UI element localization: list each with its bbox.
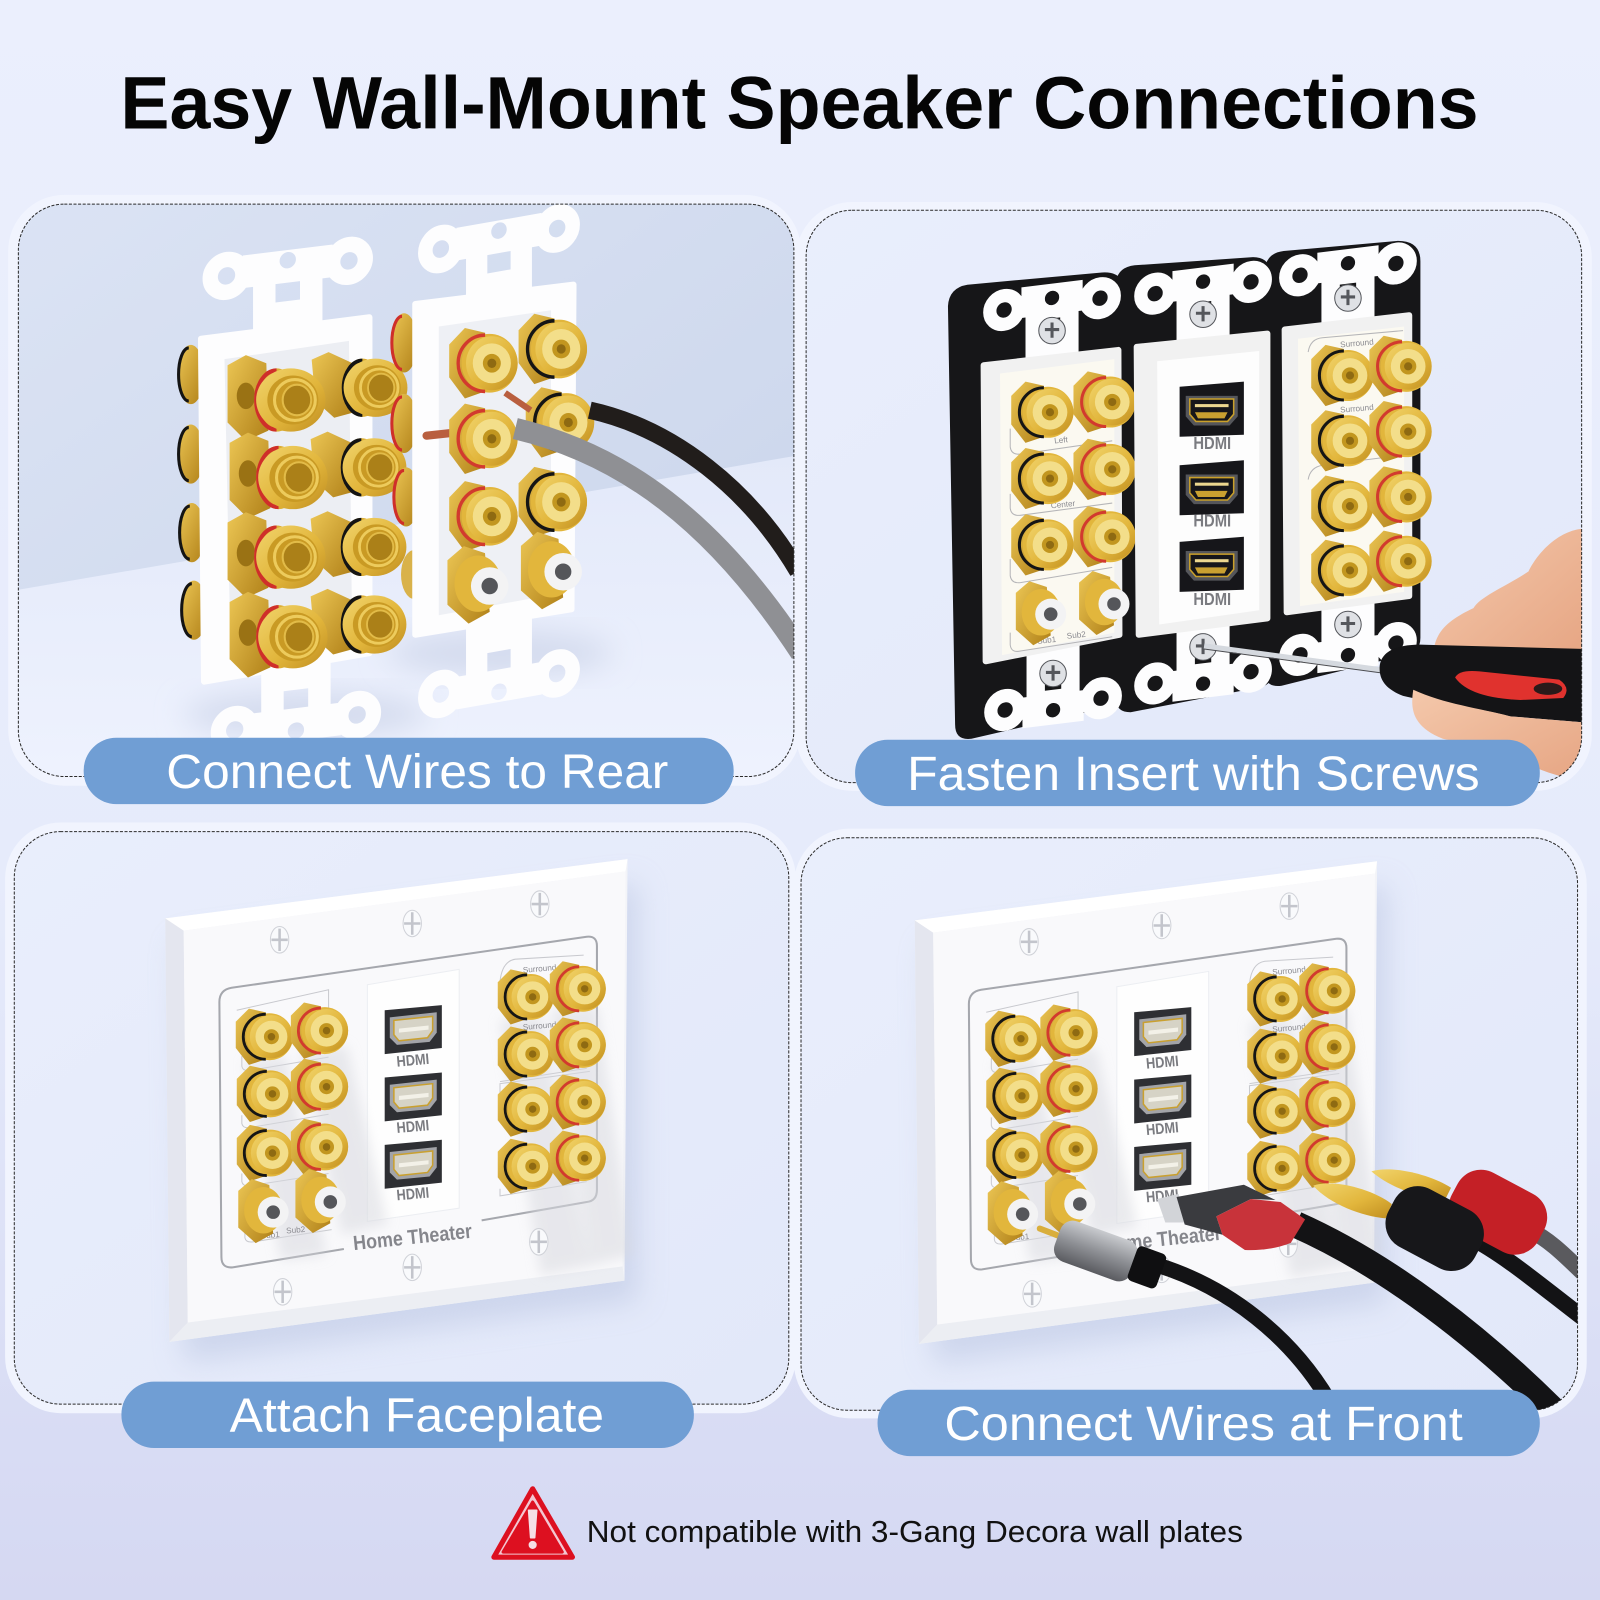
left insert: speaker posts and sub outputs	[984, 350, 1136, 661]
white straps and screws	[990, 241, 1410, 732]
faceplate with ports: Sub1	[1010, 1232, 1030, 1243]
label pill	[121, 1382, 694, 1448]
middle insert: three HDMI ports: HDMI	[1193, 589, 1231, 609]
right insert: surround speaker posts: Surround	[1340, 403, 1374, 415]
dashed outline	[14, 832, 789, 1404]
label pill: Fasten Insert with Screws	[907, 748, 1480, 801]
panel: fasten insert with screws	[796, 202, 1592, 806]
right insert: surround speaker posts: Surround	[1340, 337, 1374, 349]
faceplate with ports: Sub1	[260, 1230, 281, 1241]
left insert: speaker posts and sub outputs: Center	[1050, 499, 1076, 510]
dashed outline	[18, 204, 794, 777]
panel: attach faceplate	[5, 822, 796, 1448]
right insert: surround speaker posts	[1285, 315, 1432, 612]
label pill	[855, 740, 1540, 806]
dashed outline	[801, 838, 1578, 1410]
faceplate with ports	[915, 861, 1387, 1364]
left insert: speaker posts and sub outputs: Sub1	[1037, 635, 1057, 646]
faceplate with ports: HDMI	[396, 1185, 430, 1204]
faceplate with ports: Sub2	[286, 1225, 306, 1235]
faceplate with ports: Surround	[1272, 965, 1307, 977]
warning text: Not compatible with 3-Gang Decora wall plates	[587, 1515, 1243, 1549]
label pill: Connect Wires to Rear	[166, 746, 668, 799]
middle insert: three HDMI ports: HDMI	[1193, 433, 1231, 453]
title: Easy Wall-Mount Speaker Connections	[120, 62, 1479, 145]
left rear insert with threaded posts	[178, 240, 407, 750]
faceplate with ports: HDMI	[1145, 1053, 1179, 1073]
right rear insert with posts	[391, 207, 594, 715]
black and grey speaker cables	[515, 410, 801, 653]
faceplate with ports: Surround	[522, 1020, 557, 1032]
dashed outline	[806, 210, 1582, 783]
panel: connect wires at front	[794, 829, 1587, 1456]
faceplate with ports: Home Theater	[352, 1221, 473, 1255]
connected cables and plugs	[1040, 1160, 1584, 1413]
label pill	[84, 738, 734, 804]
label pill: Attach Faceplate	[230, 1390, 604, 1443]
faceplate with ports: Home Theater	[1102, 1223, 1223, 1257]
faceplate with ports	[165, 859, 638, 1362]
middle insert: three HDMI ports: HDMI	[1193, 511, 1231, 531]
icon: hand with screwdriver	[1204, 529, 1584, 781]
left insert: speaker posts and sub outputs: Left	[1054, 435, 1069, 446]
black foam gaskets	[948, 241, 1420, 739]
icon: warning triangle	[494, 1489, 572, 1557]
left insert: speaker posts and sub outputs: Sub2	[1066, 630, 1087, 641]
faceplate with ports: HDMI	[396, 1117, 430, 1137]
label pill: Connect Wires at Front	[944, 1398, 1463, 1451]
middle insert: three HDMI ports	[1137, 334, 1267, 635]
panel: connect wires to rear	[8, 195, 801, 804]
faceplate with ports: HDMI	[1145, 1187, 1179, 1206]
faceplate with ports: Surround	[522, 963, 557, 975]
scene: wall and floor	[18, 204, 794, 777]
faceplate with ports: Surround	[1272, 1022, 1307, 1034]
label pill	[878, 1390, 1540, 1456]
faceplate with ports: HDMI	[396, 1051, 430, 1071]
faceplate with ports: HDMI	[1145, 1119, 1179, 1139]
compatibility warning	[494, 1489, 1243, 1557]
